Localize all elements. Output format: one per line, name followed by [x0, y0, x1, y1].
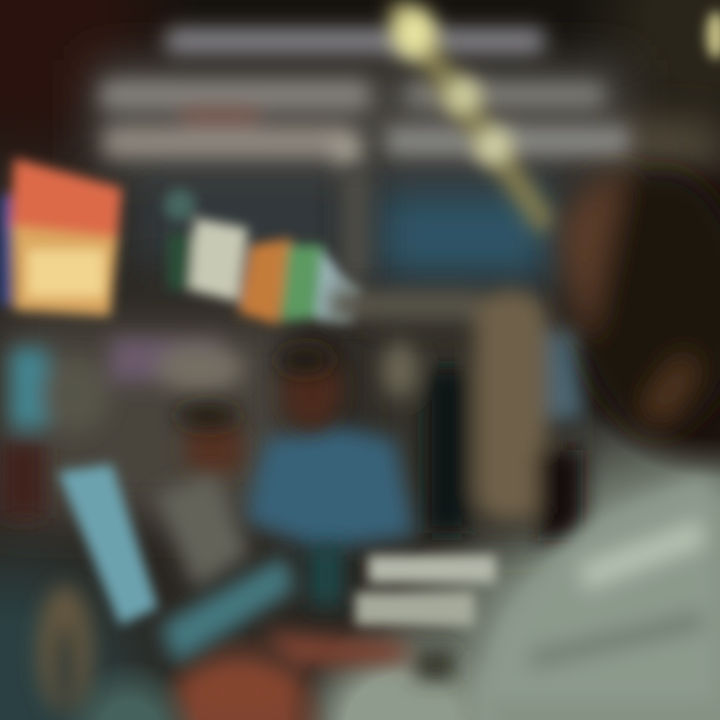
- foreground person: hair: [558, 170, 720, 430]
- string of lights: [392, 5, 720, 228]
- teal shapes and arched object lower left: [37, 555, 295, 715]
- crowd and stalls in the middle: [0, 290, 583, 540]
- figure: man in blue shirt: [245, 347, 415, 605]
- colourful sign on the left: [0, 158, 122, 316]
- heading: title text, illegible in the blurred original: [100, 28, 630, 166]
- pillar: [342, 170, 370, 280]
- light blue panel lower left: [58, 464, 158, 625]
- foreground person: pale shirt: [480, 478, 715, 700]
- background tones: [0, 60, 720, 540]
- flag-coloured banners: [164, 189, 362, 325]
- figure: child in grey: [155, 404, 250, 590]
- foreground hands: [182, 630, 455, 714]
- papers on the table: [355, 555, 496, 626]
